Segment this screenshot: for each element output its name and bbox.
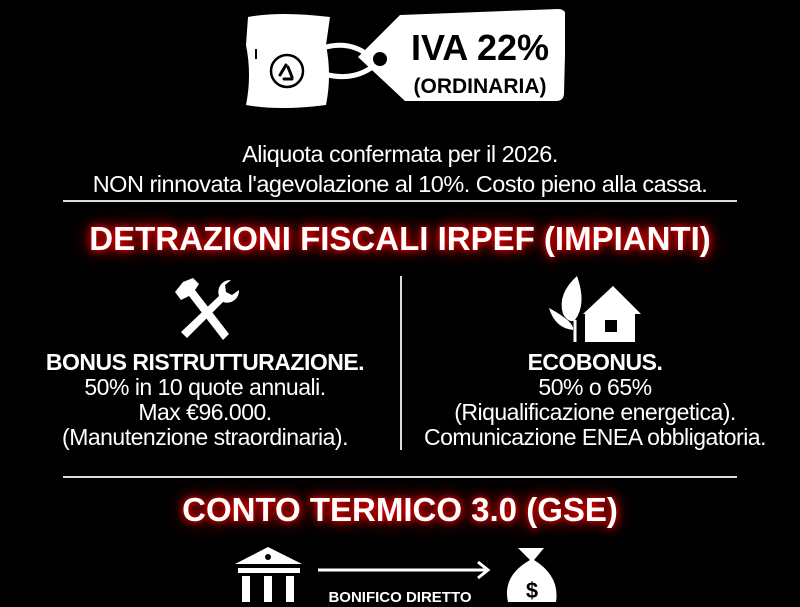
text: ecobonus details: ECOBONUS. <box>528 349 662 375</box>
price tag: (ORDINARIA) <box>414 75 546 98</box>
icon: bag with price tag <box>246 9 565 108</box>
icon: tools <box>175 278 239 340</box>
price tag <box>358 9 566 101</box>
panel: bonus ristrutturazione <box>46 278 364 450</box>
text: bonus details: BONUS RISTRUTTURAZIONE. <box>46 349 364 375</box>
text: ecobonus details: (Riqualificazione energetica). <box>454 399 736 425</box>
text: ecobonus details: 50% o 65% <box>538 374 652 400</box>
price tag: IVA 22% <box>411 27 549 68</box>
text: IVA description: Aliquota confermata per il 2026. <box>242 141 558 167</box>
icon: money bag <box>507 548 557 603</box>
text: ecobonus details: Comunicazione ENEA obbligatoria. <box>424 424 766 450</box>
diagram: bank to money <box>235 547 557 602</box>
text: bonus details: (Manutenzione straordinaria). <box>62 424 348 450</box>
icon: leaf house <box>549 276 641 342</box>
panel: ecobonus <box>424 276 766 450</box>
text: IVA description: NON rinnovata l'agevolazione al 10%. Costo pieno alla cassa. <box>93 171 707 197</box>
text: bonus details <box>46 349 364 450</box>
heading: detrazioni: DETRAZIONI FISCALI IRPEF (IMPIANTI) <box>89 220 711 257</box>
icon: bank <box>235 547 302 602</box>
icon: bag <box>246 14 330 108</box>
text: ecobonus details <box>424 349 766 450</box>
text: bonus details: 50% in 10 quote annuali. <box>84 374 326 400</box>
icon: tag ring <box>326 45 375 77</box>
heading: conto termico: CONTO TERMICO 3.0 (GSE) <box>182 491 618 528</box>
text: IVA description <box>93 141 707 197</box>
text: bonus details: Max €96.000. <box>138 399 272 425</box>
arrow <box>318 562 488 578</box>
